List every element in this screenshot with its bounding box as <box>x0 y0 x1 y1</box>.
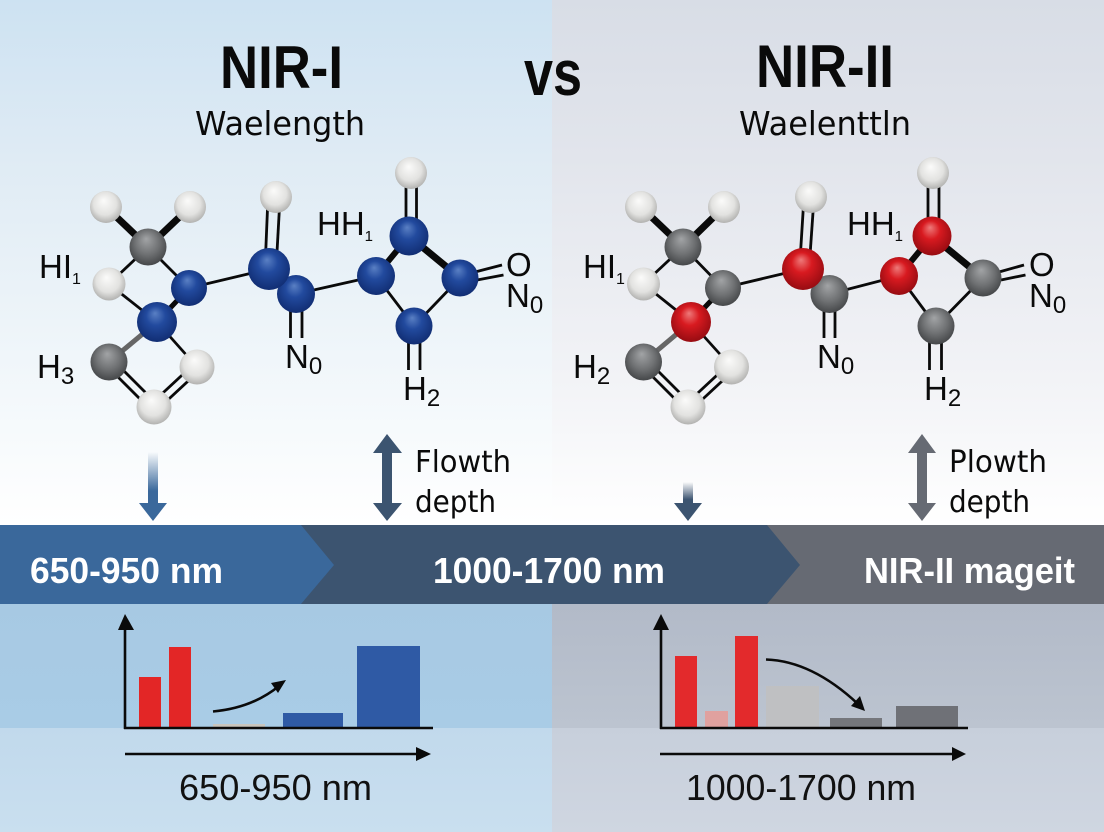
arrow: NIR-I depth double arrow <box>373 434 402 521</box>
chart: NIR-I bars <box>118 614 433 808</box>
atom labels: H <box>37 348 61 385</box>
atom labels: HI <box>39 248 72 285</box>
axes <box>118 614 433 761</box>
text: Flowth depth <box>415 445 511 520</box>
band segment: 1000-1700 nm <box>301 525 800 604</box>
molecule: NIR-I blue structure <box>37 157 543 424</box>
atoms <box>90 157 478 424</box>
band segment: 650-950 nm: 650-950 nm <box>30 550 223 591</box>
axes <box>653 614 968 761</box>
atom labels: 0 <box>1053 292 1066 319</box>
text: Plowth depth: Plowth <box>949 445 1047 480</box>
subtitle: right wavelength: Waelenttln <box>739 104 911 143</box>
curved arrow <box>213 680 286 712</box>
panel: NIR-II background <box>552 0 1104 832</box>
atom labels: 0 <box>530 292 543 319</box>
atom labels: HH <box>317 205 365 242</box>
atom labels: 1 <box>616 271 625 288</box>
panel: NIR-I background <box>0 0 552 832</box>
band segment: 650-950 nm <box>0 525 334 604</box>
atom labels <box>573 205 1066 412</box>
text: Flowth depth: depth <box>415 485 496 520</box>
arrow: NIR-II depth double arrow <box>908 434 936 521</box>
axis label: 650-950 nm <box>179 767 372 808</box>
atom labels: 2 <box>948 385 961 412</box>
atom labels: HH <box>847 205 895 242</box>
band segment: 1000-1700 nm: 1000-1700 nm <box>433 550 665 591</box>
arrow: NIR-I down arrow <box>139 452 167 521</box>
subtitle: left wavelength: Waelength <box>195 104 365 143</box>
atom labels: 0 <box>841 353 854 380</box>
molecule: NIR-II red and grey structure <box>573 157 1066 424</box>
title: NIR-II: NIR-II <box>756 33 894 100</box>
title: NIR-I: NIR-I <box>220 34 343 101</box>
bonds <box>106 173 504 410</box>
atom labels: 2 <box>427 385 440 412</box>
atom labels: N <box>1029 277 1053 314</box>
text: Flowth depth: Flowth <box>415 445 511 480</box>
atom labels: N <box>506 277 530 314</box>
bars <box>139 646 420 728</box>
atom labels: N <box>817 338 841 375</box>
text: Plowth depth <box>949 445 1047 520</box>
atom labels: 1 <box>895 228 903 245</box>
atom labels: H <box>403 370 427 407</box>
atom labels: 1 <box>365 228 373 245</box>
bonds <box>641 173 1026 410</box>
atoms <box>625 157 1002 424</box>
atom labels: N <box>285 338 309 375</box>
atom labels: H <box>573 348 597 385</box>
atom labels: 1 <box>72 271 81 288</box>
atom labels: HI <box>583 248 616 285</box>
atom labels: 2 <box>597 363 610 390</box>
chart: NIR-II bars <box>653 614 968 808</box>
curved arrow <box>766 660 865 711</box>
arrow: NIR-II down arrow <box>674 482 702 521</box>
atom labels: O <box>506 246 532 283</box>
axis label: 1000-1700 nm <box>686 767 916 808</box>
title: vs: vs <box>524 37 582 109</box>
wavelength band <box>0 525 1104 604</box>
atom labels: H <box>924 370 948 407</box>
band segment: NIR-II label: NIR-II mageit <box>864 550 1075 591</box>
bars <box>675 636 958 728</box>
text: Plowth depth: depth <box>949 485 1030 520</box>
atom labels: 0 <box>309 353 322 380</box>
atom labels: 3 <box>61 363 74 390</box>
atom labels <box>37 205 543 412</box>
atom labels: O <box>1029 246 1055 283</box>
